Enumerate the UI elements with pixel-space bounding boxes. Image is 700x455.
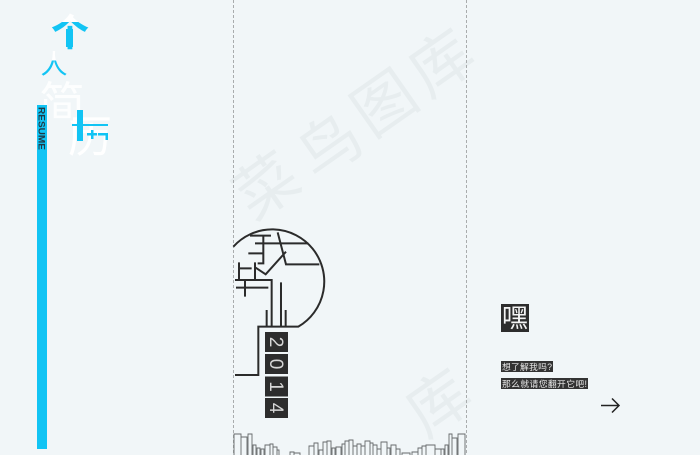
watermark: 库 [394, 358, 484, 450]
blue vertical bar with RESUME label [36, 105, 47, 449]
watermark: 图 [340, 58, 430, 150]
message line 1: 想了解我吗? [502, 361, 552, 372]
title: 个人简历: 简 [39, 78, 85, 130]
title: 个人简历: 人 [40, 50, 68, 80]
year blocks: 2014: 4 [265, 403, 286, 414]
city skyline [234, 434, 465, 455]
blue vertical bar with RESUME label: RESUME [36, 107, 46, 150]
watermark: 鸟 [285, 101, 375, 193]
watermark: 菜 [222, 141, 312, 233]
greeting icon: 嘿: 嘿 [502, 303, 528, 333]
title: 个人简历: 历 [68, 113, 112, 162]
watermark: 库 [397, 18, 487, 110]
year blocks: 2014: 2 [265, 337, 286, 347]
message line 2: 那么就请您翻开它吧! [502, 378, 587, 389]
fold lines [234, 0, 466, 455]
arrow [601, 398, 619, 412]
year blocks: 2014 [265, 332, 288, 418]
year blocks: 2014: 0 [265, 359, 286, 369]
watermark [222, 18, 487, 450]
emblem: 我 in circle [233, 229, 324, 375]
title: 个人简历 [39, 13, 112, 162]
year blocks: 2014: 1 [265, 381, 286, 392]
title: 个人简历: 个 [51, 13, 89, 55]
